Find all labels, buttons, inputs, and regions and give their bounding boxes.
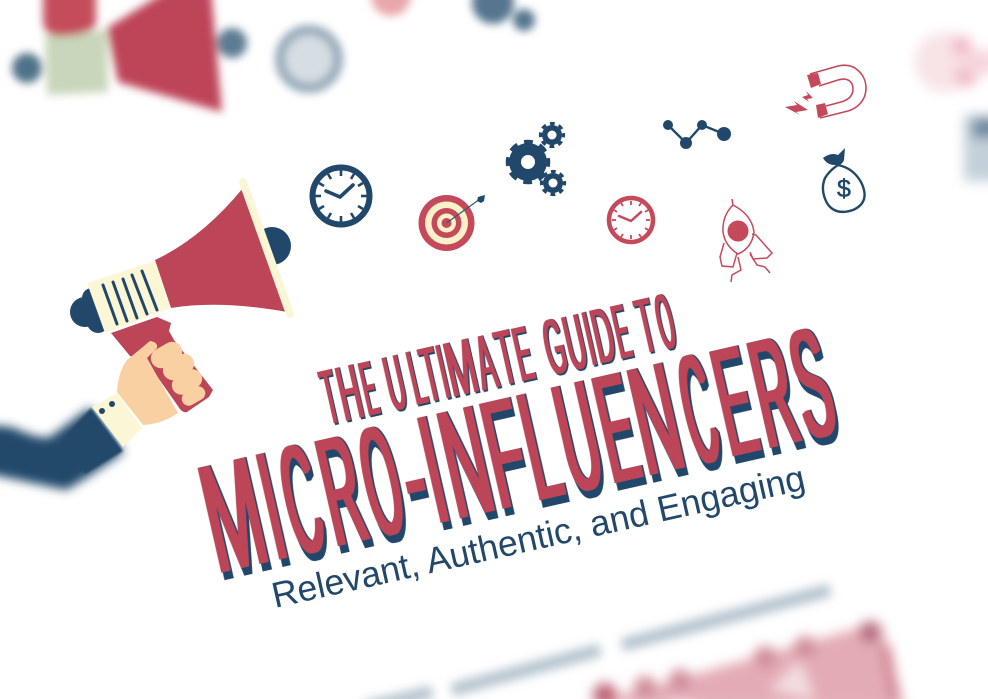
heading: micro-influencers (187, 296, 848, 607)
heading: the ultimate guide to: I (576, 295, 602, 382)
blurred bottom text (365, 590, 830, 699)
heading: micro-influencers: S (777, 296, 848, 473)
heading: the ultimate guide to: D (584, 290, 622, 380)
heading: the ultimate guide to: E (506, 309, 540, 398)
heading: the ultimate guide to: T (629, 281, 663, 370)
hand (117, 338, 208, 425)
body with vents (87, 261, 171, 333)
heading: the ultimate guide to: T (413, 330, 448, 419)
heading: micro-influencers: C (665, 322, 731, 498)
heading: micro-influencers: R (305, 402, 379, 580)
heading: micro-influencers: - (384, 388, 442, 562)
blurred right dark icon (964, 115, 988, 181)
heading: the ultimate guide to: U (556, 297, 594, 387)
rear cap (70, 288, 109, 333)
heading: micro-influencers: E (700, 313, 770, 490)
heading: micro-influencers: U (541, 348, 616, 526)
heading: micro-influencers: L (506, 358, 574, 534)
heading: the ultimate guide to: I (430, 328, 456, 415)
icon: network line chart (663, 120, 731, 149)
blurred top pink shape (371, 0, 411, 16)
megaphone with hand (0, 182, 291, 490)
heading: the ultimate guide to: L (400, 333, 433, 422)
cuff (92, 393, 142, 447)
blurred top clock (280, 30, 338, 88)
heading: the ultimate guide to: H (329, 347, 370, 438)
heading: the ultimate guide to: T (314, 352, 346, 441)
icon: target with arrow (418, 195, 485, 251)
heading: micro-influencers: I (246, 421, 297, 593)
heading: micro-influencers: E (582, 340, 652, 517)
rim (243, 182, 290, 314)
blurred bottom headline (585, 621, 905, 699)
heading: micro-influencers: I (407, 384, 460, 557)
heading: micro-influencers: O (346, 393, 417, 571)
icon: money bag: $ (837, 175, 851, 203)
sleeve (0, 407, 124, 490)
icon: gears (508, 124, 564, 194)
icon: rocket (720, 199, 772, 282)
heading: the ultimate guide to: G (535, 301, 574, 391)
blurred top megaphone (12, 0, 247, 112)
icon: magnet with sparks (785, 65, 866, 118)
icon: navy clock (312, 168, 370, 224)
heading: the ultimate guide to: E (353, 344, 385, 432)
horn (155, 188, 287, 312)
heading: the ultimate guide to: E (605, 287, 637, 376)
heading: the ultimate guide to: U (377, 337, 413, 427)
heading: the ultimate guide to (314, 277, 682, 441)
icon: red clock (609, 198, 653, 242)
heading: the ultimate guide to: M (437, 321, 485, 414)
blurred top gears (472, 0, 535, 31)
heading: micro-influencers: N (616, 330, 696, 509)
heading: micro-influencers: F (469, 365, 541, 543)
heading: micro-influencers: C (266, 412, 336, 589)
heading: the ultimate guide to: A (468, 317, 504, 407)
icon: money bag (823, 148, 865, 212)
text: O (648, 277, 682, 366)
handle (111, 317, 213, 412)
heading: micro-influencers: M (187, 425, 280, 607)
heading: micro-influencers: N (426, 373, 505, 552)
heading: micro-influencers: R (737, 304, 811, 482)
heading: the ultimate guide to: T (488, 313, 523, 402)
blurred right pink icon (915, 32, 988, 92)
front cap (253, 227, 291, 265)
subtitle: Relevant, Authentic, and Engaging (268, 457, 809, 616)
